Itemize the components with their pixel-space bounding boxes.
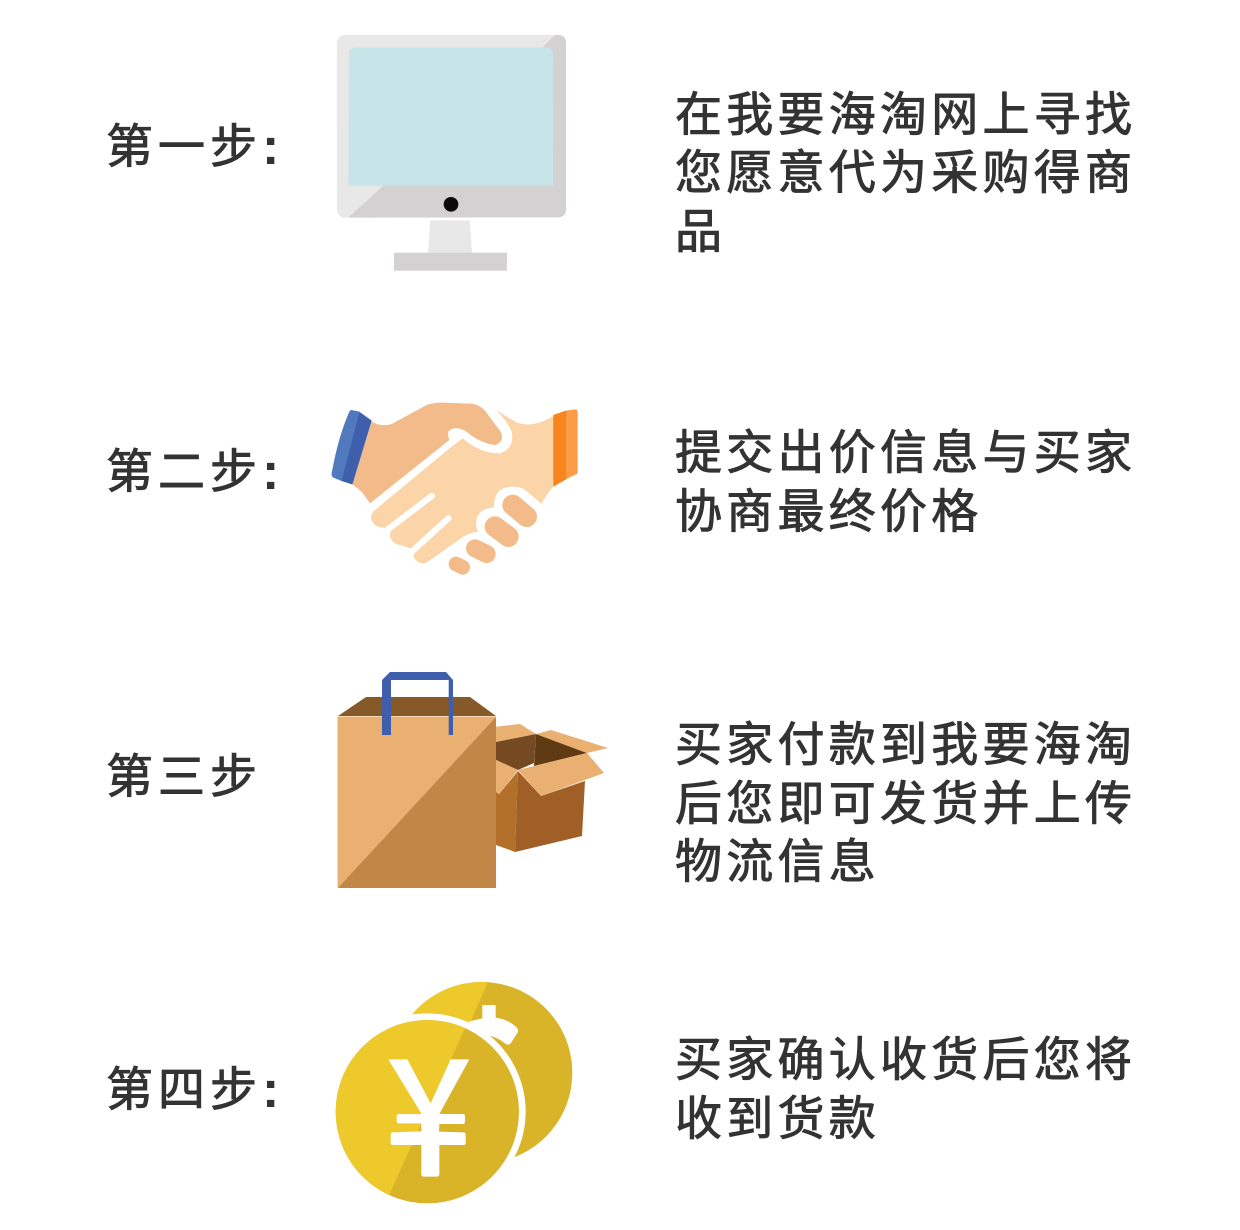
step 1 description: 您愿意代为采购得商	[675, 146, 1136, 199]
step 3 description	[675, 718, 1136, 888]
step 4 description: 买家确认收货后您将	[675, 1033, 1136, 1086]
step 1 label: :	[262, 118, 279, 176]
step 1 label: 第一步	[106, 120, 262, 173]
step 2 description: 协商最终价格	[675, 484, 982, 538]
step 2 description: 提交出价信息与买家	[675, 426, 1136, 479]
step 2 description	[675, 426, 1136, 538]
step 2 label: 第二步	[106, 445, 262, 498]
icon: computer monitor	[337, 35, 566, 271]
step 4 label: 第四步	[106, 1063, 262, 1116]
step 4 label: :	[262, 1061, 279, 1119]
step 1 description	[675, 88, 1136, 258]
step 1 description: 品	[675, 204, 726, 258]
step 3 description: 物流信息	[675, 835, 880, 888]
icon: yen coins	[336, 982, 572, 1204]
step 3 label: 第三步	[106, 750, 262, 803]
icon: handshake	[332, 403, 578, 567]
step 3 description: 后您即可发货并上传	[675, 776, 1136, 830]
paper bag	[338, 672, 496, 888]
step 3 description: 买家付款到我要海淘	[675, 718, 1136, 771]
step 4 description	[675, 1033, 1136, 1144]
icon: shopping bag and cardboard box	[338, 672, 608, 888]
step 4 description: 收到货款	[675, 1092, 880, 1144]
step 2 label: :	[262, 443, 279, 501]
step 1 description: 在我要海淘网上寻找	[675, 88, 1136, 140]
